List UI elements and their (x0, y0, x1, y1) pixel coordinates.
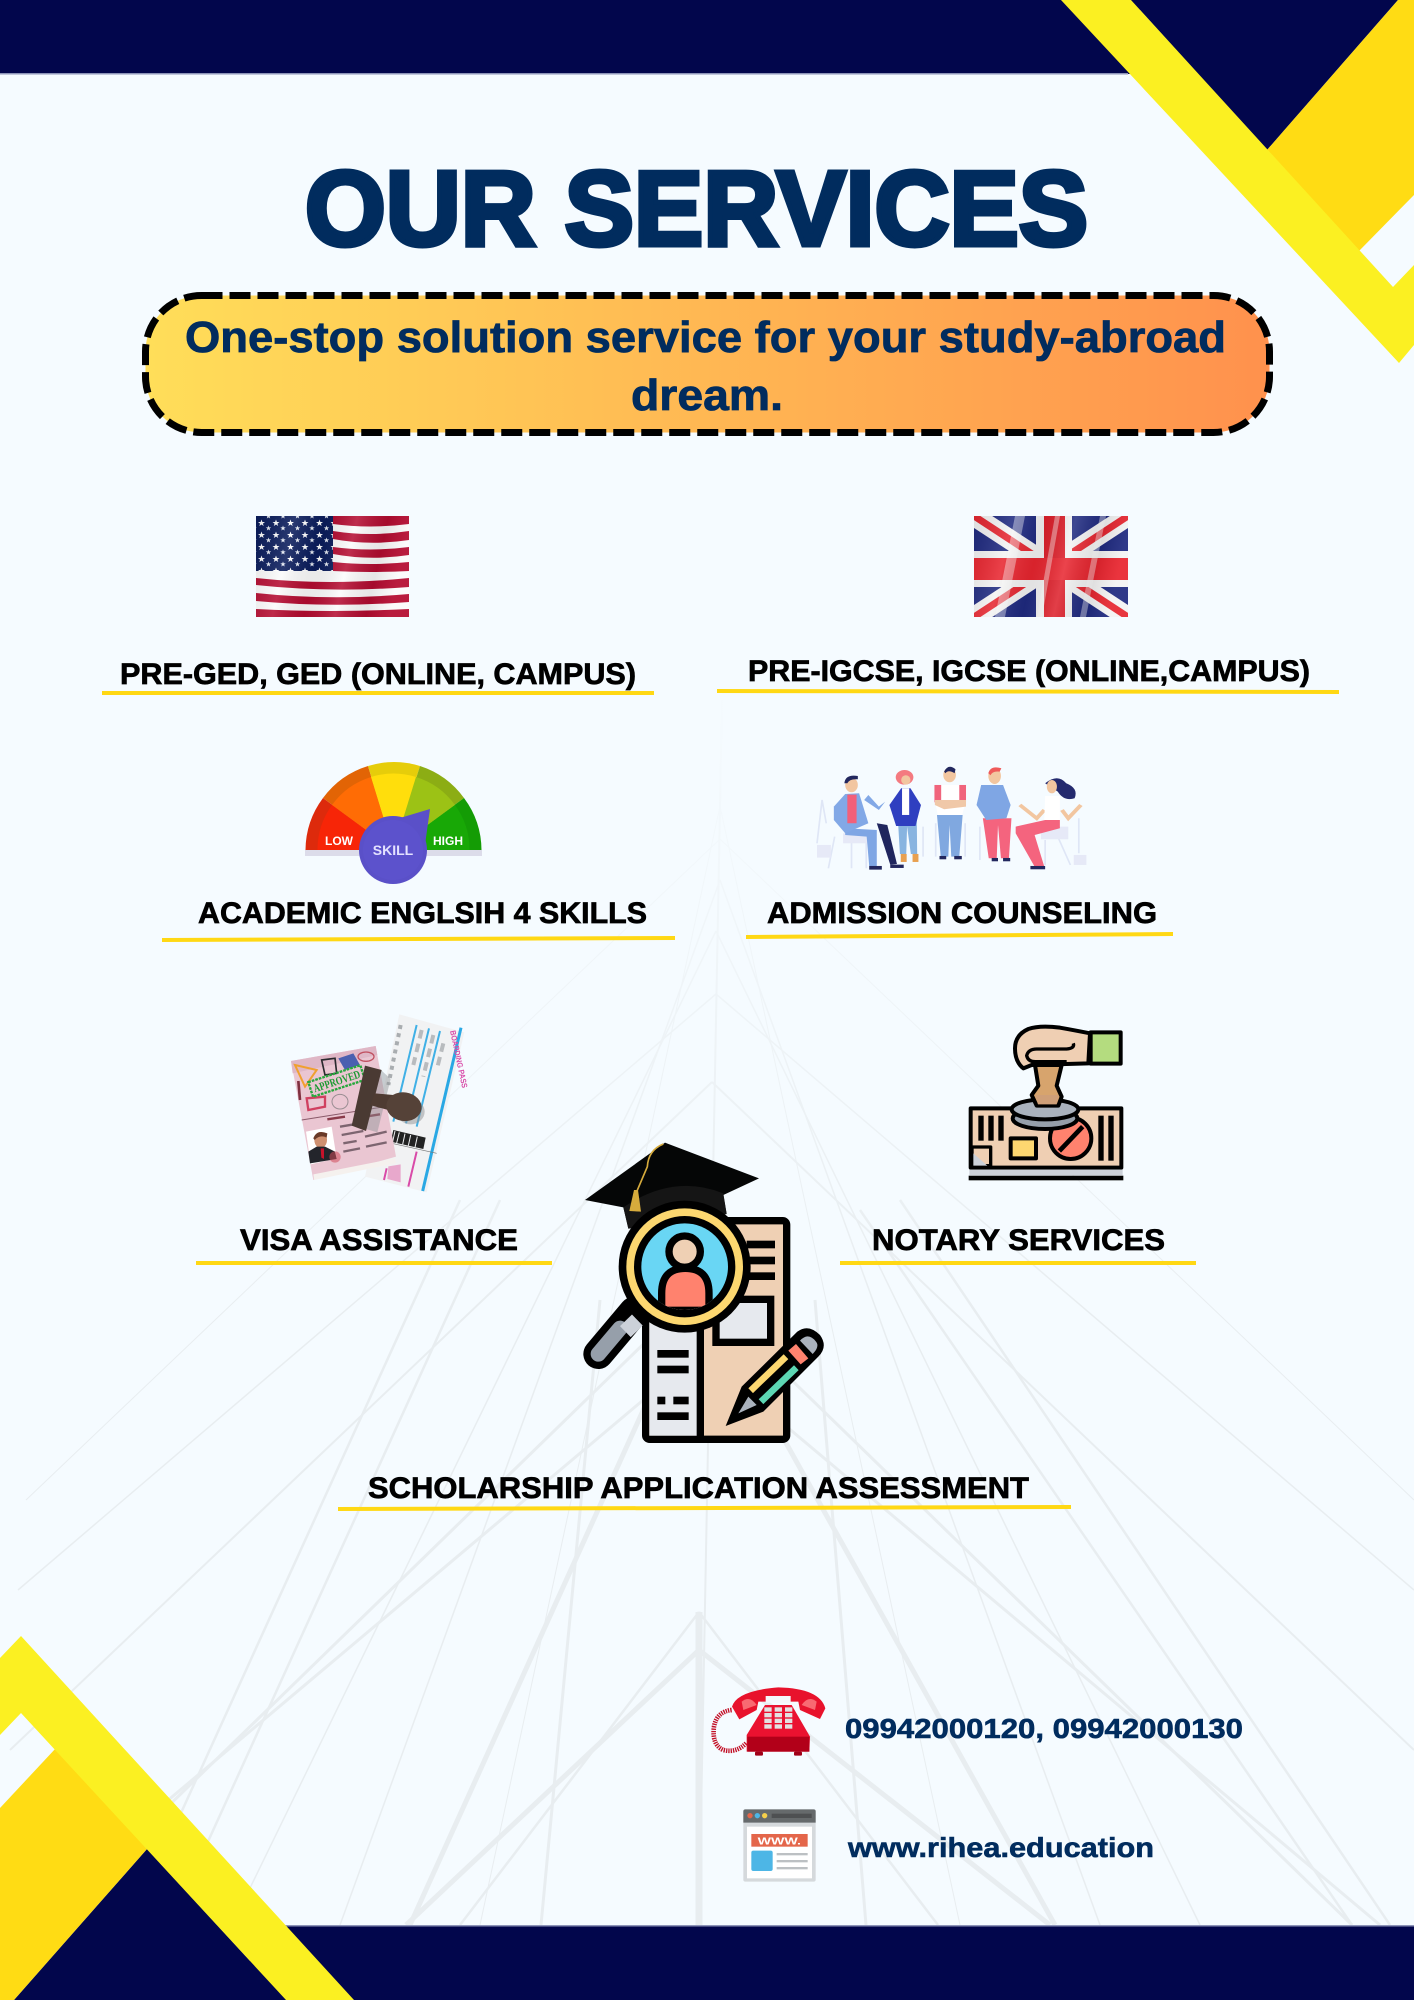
bottom banner (250, 1925, 1414, 2000)
top banner (0, 0, 1140, 74)
rubber stamp (352, 1066, 425, 1132)
subtitle banner: One-stop solution service for your study-abroad (185, 313, 1226, 362)
boarding pass (365, 1014, 469, 1192)
person 1 (834, 776, 904, 870)
icon: UK flag (974, 516, 1128, 617)
icon: skill gauge: SKILL (373, 842, 414, 858)
label: Notary services: NOTARY SERVICES (872, 1224, 1165, 1257)
icon: counseling group (817, 767, 1086, 870)
label: PRE-IGCSE: PRE-IGCSE, IGCSE (ONLINE,CAMPUS) (748, 655, 1310, 688)
passport (291, 1046, 396, 1180)
graduation cap (585, 1143, 759, 1229)
document (646, 1221, 787, 1439)
icon: skill gauge (305, 762, 482, 884)
icon: website browser: WWW. (758, 1836, 801, 1847)
passport: APPROVED (312, 1069, 362, 1095)
label: PRE-GED: PRE-GED, GED (ONLINE, CAMPUS) (120, 658, 636, 691)
icon: website browser (743, 1809, 816, 1882)
icon: telephone (714, 1687, 825, 1756)
website url: www.rihea.education (847, 1832, 1154, 1863)
pencil (726, 1328, 824, 1426)
icon: US flag (256, 516, 409, 617)
magnifier (598, 1201, 751, 1354)
subtitle banner: dream. (631, 371, 783, 420)
label: Admission counseling: ADMISSION COUNSELING (767, 897, 1157, 930)
person 4 (977, 767, 1011, 861)
phone numbers: 09942000120, 09942000130 (845, 1713, 1243, 1744)
boarding pass: BOARDING PASS (448, 1030, 469, 1089)
person 5 (1016, 778, 1081, 869)
bottom-left corner decoration (0, 1636, 354, 2000)
icon: skill gauge: LOW (325, 834, 354, 848)
icon: skill gauge: HIGH (433, 834, 463, 848)
title: OUR SERVICES (305, 150, 1088, 268)
label: Academic English: ACADEMIC ENGLSIH 4 SKILLS (198, 897, 647, 930)
icon: notary stamp (969, 1027, 1123, 1180)
label: Scholarship: SCHOLARSHIP APPLICATION ASSESSMENT (368, 1472, 1029, 1505)
subtitle banner (146, 296, 1270, 432)
icon: visa documents (291, 1014, 469, 1192)
person 3 (934, 767, 966, 859)
label: Visa assistance: VISA ASSISTANCE (240, 1224, 518, 1257)
person 2 (889, 770, 921, 862)
top-right corner decoration (1061, 0, 1414, 363)
icon: scholarship assessment (585, 1143, 824, 1439)
